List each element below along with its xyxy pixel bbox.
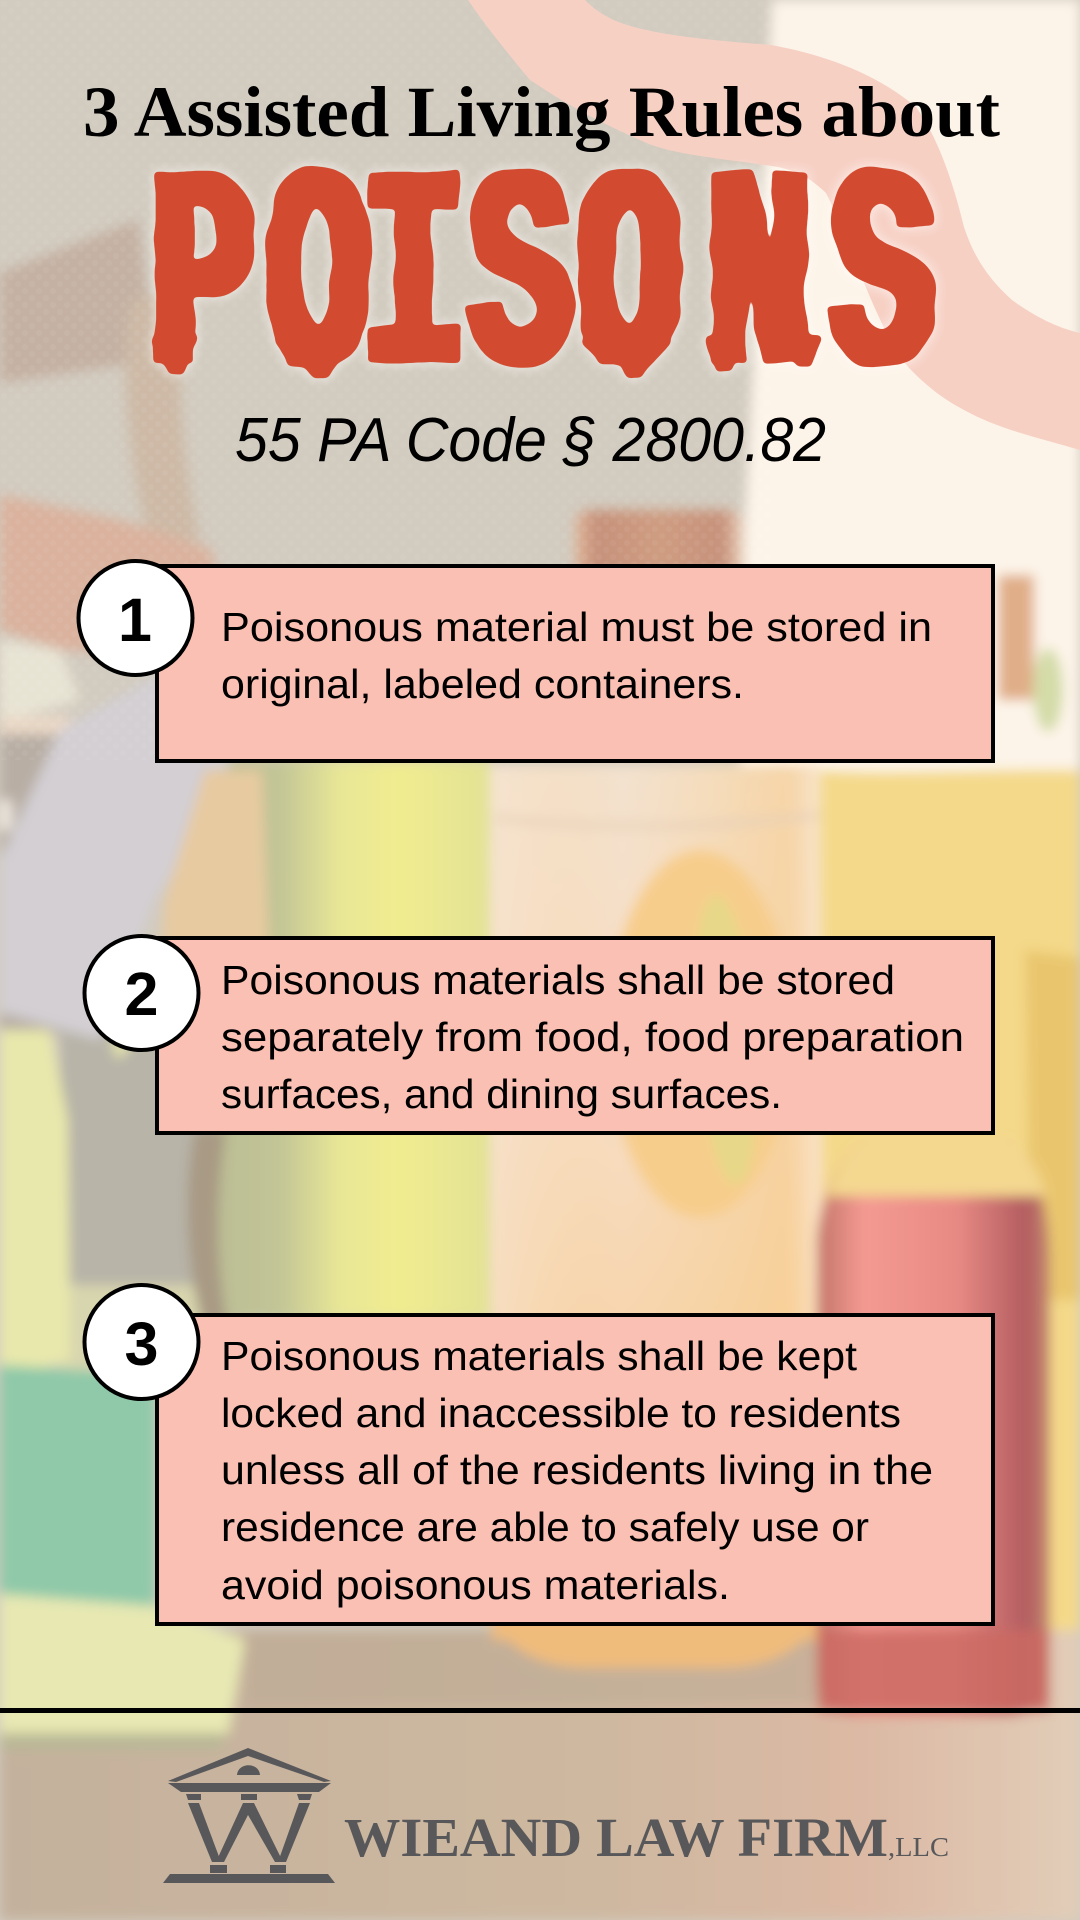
rule 2 text: separately from food, food preparation: [221, 1014, 964, 1060]
rule 1 text: [221, 604, 932, 707]
footer divider: [0, 1708, 1080, 1713]
panel: rule 2: [84, 936, 993, 1133]
decorative pink swoosh: [468, 0, 1080, 450]
firm name: WIEAND LAW FIRM: [344, 1807, 888, 1868]
number badge 2: 2: [125, 960, 158, 1028]
rule 1 text: original, labeled containers.: [221, 661, 744, 707]
footer logo: Wieand Law Firm: [163, 1748, 949, 1883]
panel: rule 1: [78, 561, 993, 761]
rule 2 text: [221, 957, 964, 1117]
rule 3 text: residence are able to safely use or: [221, 1504, 869, 1550]
rule 3 text: [221, 1333, 933, 1608]
number badge 2: [84, 936, 198, 1050]
subtitle: code citation: 55 PA Code § 2800.82: [235, 406, 826, 475]
heading: POISONS in dripping letters: POISONS: [150, 127, 934, 445]
number badge 1: 1: [118, 586, 152, 654]
number badge 1: [78, 561, 192, 675]
icon: courthouse W: [163, 1748, 335, 1883]
rule 3 text: Poisonous materials shall be kept: [221, 1333, 858, 1379]
rule 3 text: unless all of the residents living in the: [221, 1447, 933, 1493]
number badge 3: [84, 1285, 198, 1399]
rule 2 text: surfaces, and dining surfaces.: [221, 1071, 782, 1117]
title: 3 Assisted Living Rules about: [83, 72, 1000, 152]
rule 1 text: Poisonous material must be stored in: [221, 604, 932, 650]
number badge 3: 3: [125, 1310, 158, 1378]
rule 3 text: locked and inaccessible to residents: [221, 1390, 901, 1436]
rule 3 text: avoid poisonous materials.: [221, 1562, 730, 1608]
rule 2 text: Poisonous materials shall be stored: [221, 957, 895, 1003]
LLC suffix: ,LLC: [888, 1832, 949, 1862]
panel: rule 3: [84, 1285, 993, 1624]
